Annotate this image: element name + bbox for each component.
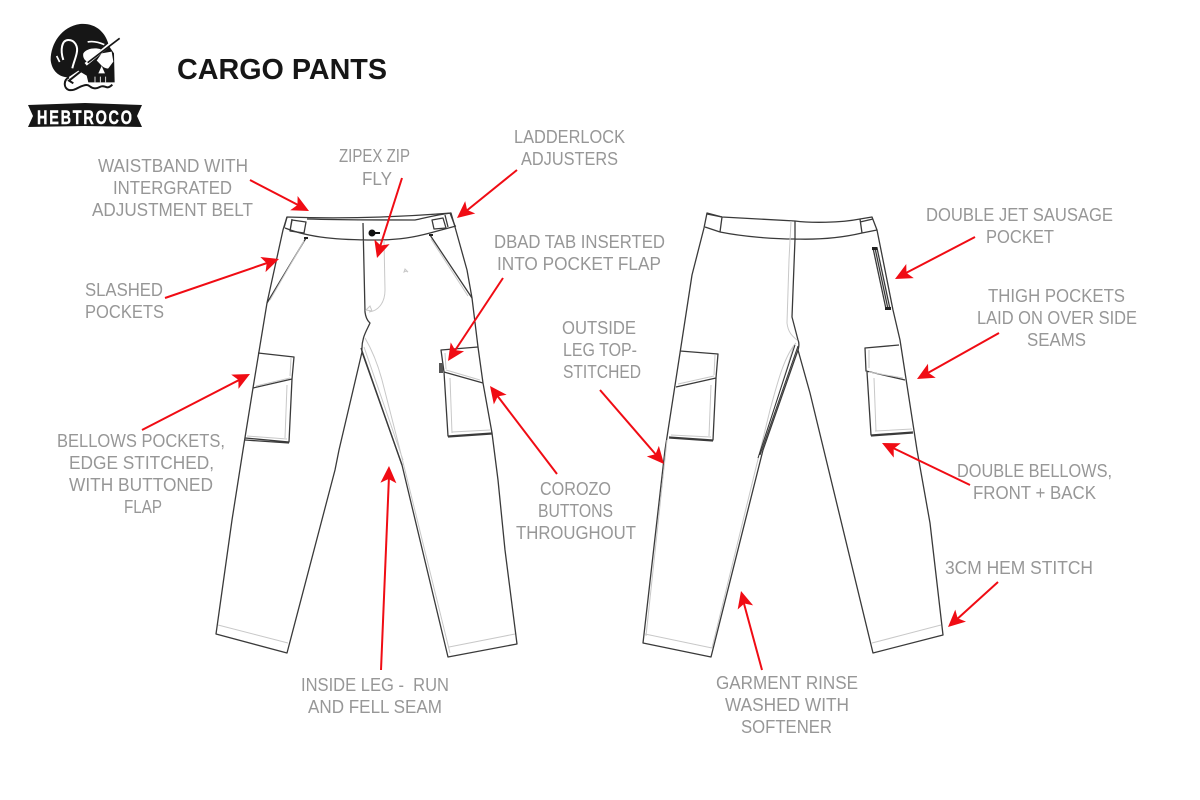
title: CARGO PANTS	[177, 54, 387, 86]
label: waistband	[92, 156, 253, 220]
banner with brand name: HEBTROCO	[37, 107, 132, 129]
front outline	[216, 213, 517, 657]
label: corozo buttons: BUTTONS	[538, 501, 613, 521]
right bellows pocket, back	[865, 345, 913, 436]
label: inside leg	[301, 675, 449, 717]
label: zip fly: FLY	[362, 169, 392, 189]
label: zip fly: ZIPEX ZIP	[339, 146, 410, 166]
label: waistband: INTERGRATED	[113, 178, 232, 198]
arrow: bellows pockets	[142, 367, 254, 430]
label: bellows pockets: EDGE STITCHED,	[69, 453, 214, 473]
label: double bellows	[957, 461, 1112, 503]
ladderlock adjusters	[284, 213, 455, 233]
back view of cargo pants	[643, 213, 943, 657]
label: bellows pockets: WITH BUTTONED	[69, 475, 213, 495]
label: outside leg: LEG TOP-	[563, 340, 637, 360]
slashed pockets	[267, 235, 472, 303]
label: garment rinse: GARMENT RINSE	[716, 673, 858, 693]
arrow: corozo buttons	[484, 381, 557, 474]
label: double bellows: FRONT + BACK	[973, 483, 1096, 503]
left bellows pocket, back	[669, 351, 718, 441]
label: thigh pockets	[977, 286, 1137, 350]
label: corozo buttons: THROUGHOUT	[516, 523, 636, 543]
arrow: ladderlock	[452, 170, 517, 224]
label: double bellows: DOUBLE BELLOWS,	[957, 461, 1112, 481]
label: zip fly	[339, 146, 410, 189]
label: bellows pockets: BELLOWS POCKETS,	[57, 431, 225, 451]
label: waistband: ADJUSTMENT BELT	[92, 200, 253, 220]
belt loops	[705, 214, 877, 233]
arrow: garment rinse	[733, 589, 762, 670]
double jet sausage pocket	[872, 247, 891, 310]
label: outside leg	[562, 318, 641, 382]
label: slashed pockets: SLASHED	[85, 280, 163, 300]
label: sausage pocket: DOUBLE JET SAUSAGE	[926, 205, 1113, 225]
back hem stitching	[645, 625, 941, 648]
label: waistband: WAISTBAND WITH	[98, 156, 248, 176]
arrow: thigh pockets	[913, 333, 999, 386]
label: bellows pockets	[57, 431, 225, 517]
front view of cargo pants	[216, 213, 517, 657]
annotation labels	[57, 127, 1137, 737]
arrow: dbad tab	[441, 278, 503, 365]
label: bellows pockets: FLAP	[124, 497, 162, 517]
zip button	[368, 230, 380, 236]
label: garment rinse: SOFTENER	[741, 717, 832, 737]
label: inside leg: AND FELL SEAM	[308, 697, 442, 717]
label: outside leg: OUTSIDE	[562, 318, 636, 338]
label: thigh pockets: SEAMS	[1027, 330, 1086, 350]
arrow: inside leg	[380, 466, 397, 670]
label: dbad tab	[494, 232, 665, 274]
back outline	[643, 213, 943, 657]
icon: skull	[51, 24, 120, 90]
label: outside leg: STITCHED	[563, 362, 641, 382]
label: ladderlock	[514, 127, 625, 169]
arrow: zip fly	[369, 178, 402, 260]
label: thigh pockets: THIGH POCKETS	[988, 286, 1125, 306]
label: sausage pocket	[926, 205, 1113, 247]
fly stitching	[366, 240, 408, 312]
front waistband	[285, 213, 456, 352]
label: ladderlock: ADJUSTERS	[521, 149, 618, 169]
label: corozo buttons: COROZO	[540, 479, 611, 499]
red annotation arrows	[142, 170, 999, 670]
label: slashed pockets	[85, 280, 164, 322]
label: garment rinse: WASHED WITH	[725, 695, 849, 715]
arrow: sausage pocket	[891, 237, 975, 286]
label: corozo buttons	[516, 479, 636, 543]
inseam run and fell stitching	[361, 348, 402, 465]
label: inside leg: INSIDE LEG - RUN	[301, 675, 449, 695]
label: ladderlock: LADDERLOCK	[514, 127, 625, 147]
label: slashed pockets: POCKETS	[85, 302, 164, 322]
label: sausage pocket: POCKET	[986, 227, 1054, 247]
logo: Hebtroco skull and banner	[28, 24, 142, 129]
label: hem stitch: 3CM HEM STITCH	[945, 558, 1093, 578]
arrow: waistband	[250, 180, 313, 218]
arrow: outside leg	[600, 390, 670, 469]
right bellows pocket	[439, 347, 492, 437]
arrow: slashed pockets	[165, 251, 282, 298]
arrow: double bellows	[878, 436, 970, 485]
back seam stitching	[646, 221, 797, 648]
front hem stitching	[218, 625, 515, 647]
label: garment rinse	[716, 673, 858, 737]
left bellows pocket	[245, 353, 294, 443]
label: dbad tab: INTO POCKET FLAP	[497, 254, 661, 274]
label: dbad tab: DBAD TAB INSERTED	[494, 232, 665, 252]
arrow: hem stitch	[943, 582, 998, 633]
back waistband	[720, 221, 862, 350]
label: thigh pockets: LAID ON OVER SIDE	[977, 308, 1137, 328]
